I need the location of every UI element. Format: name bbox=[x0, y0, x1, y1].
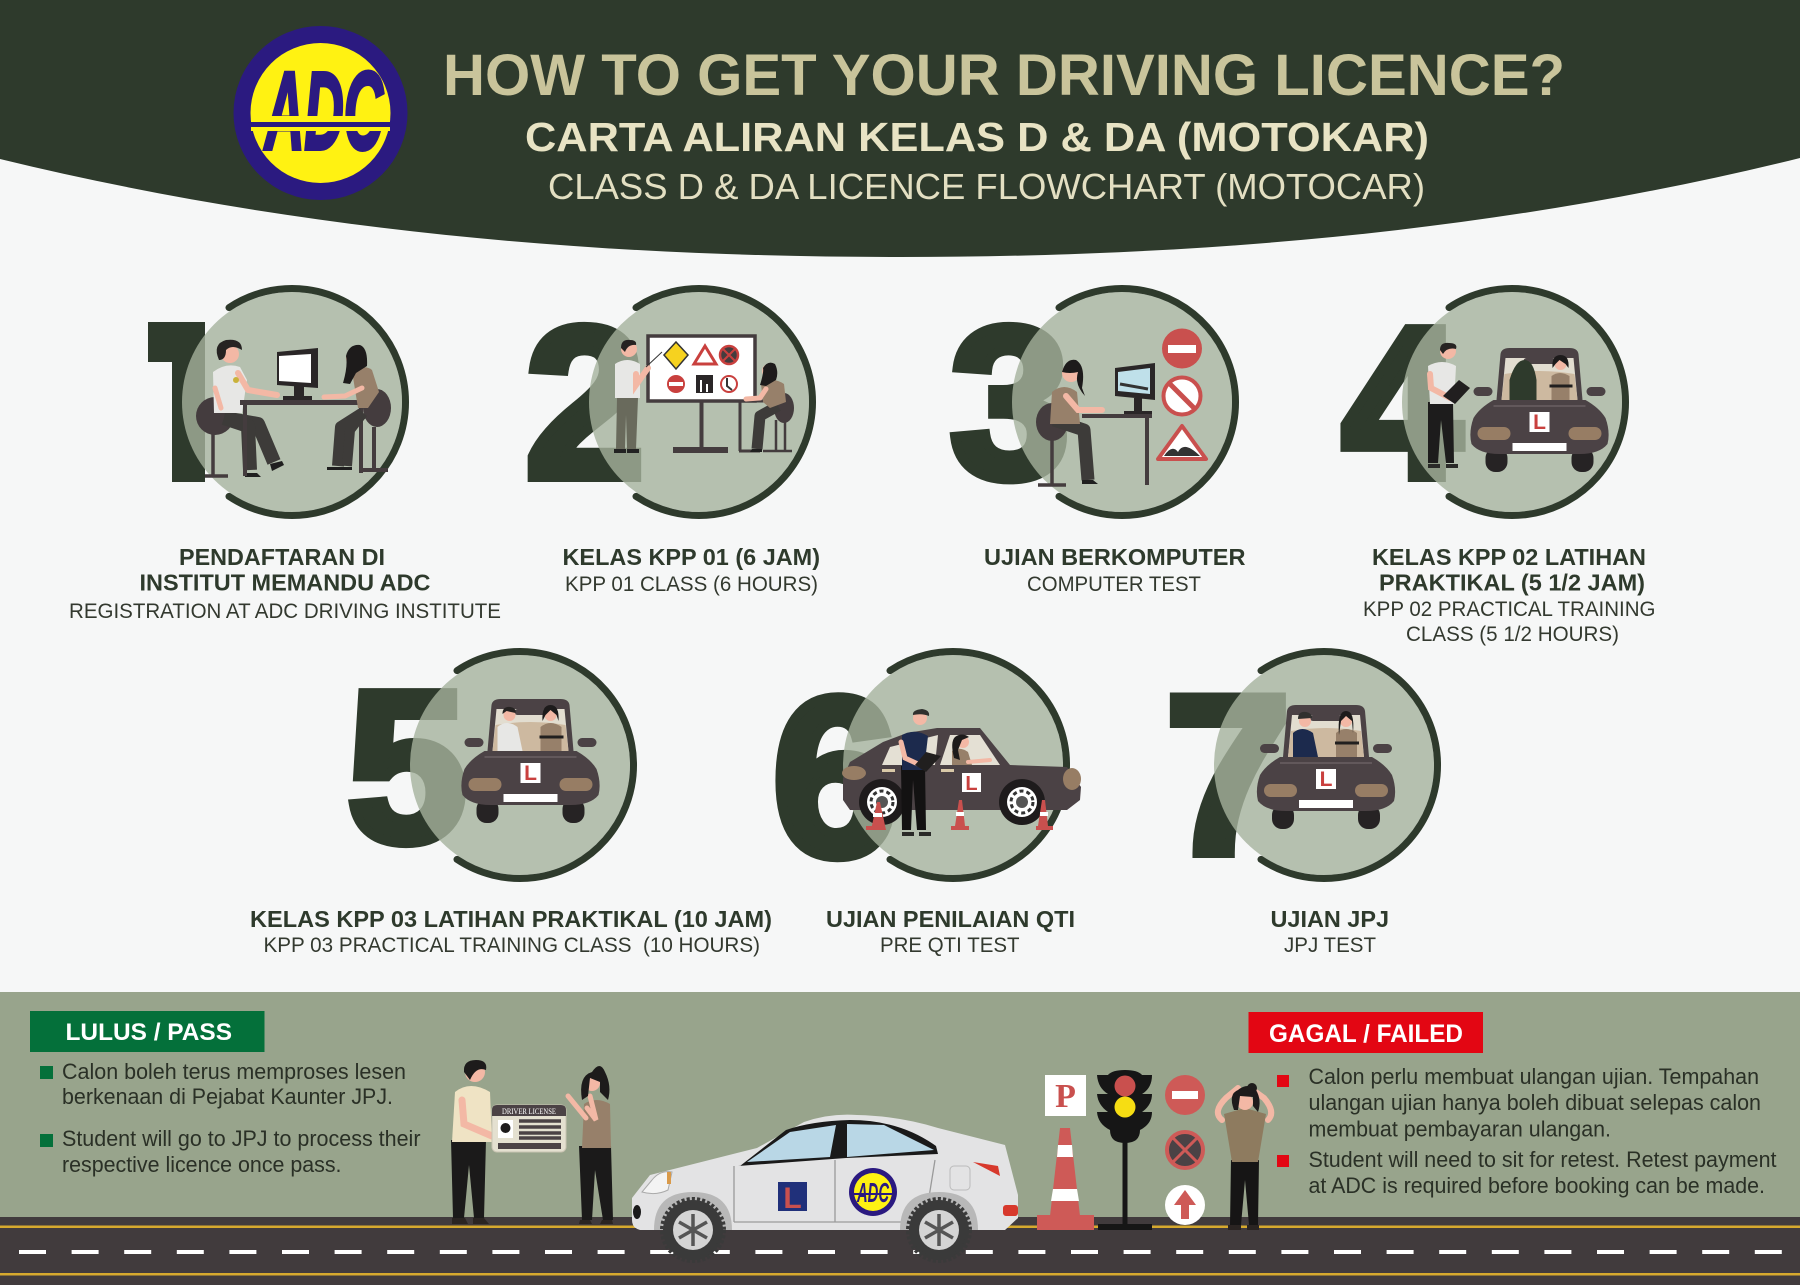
pass label bbox=[30, 1011, 264, 1052]
fail text: at ADC is required before booking can be made. bbox=[1308, 1173, 1765, 1198]
pass text: Student will go to JPJ to process their bbox=[62, 1126, 420, 1151]
step 1 panel bbox=[148, 285, 409, 519]
step 5 caption: KELAS KPP 03 LATIHAN PRAKTIKAL (10 JAM) bbox=[250, 906, 772, 932]
step 7 caption bbox=[1270, 906, 1389, 957]
fail text: Student will need to sit for retest. Retest payment bbox=[1308, 1147, 1776, 1172]
fail text: Calon perlu membuat ulangan ujian. Tempahan bbox=[1308, 1064, 1759, 1089]
step 3 caption bbox=[984, 544, 1246, 596]
step 6 panel bbox=[772, 650, 1081, 903]
illustration: man and woman with licence card: DRIVER LICENSE bbox=[502, 1107, 556, 1116]
fail text: ulangan ujian hanya boleh dibuat selepas calon bbox=[1308, 1090, 1761, 1115]
step 4 caption: KELAS KPP 02 LATIHAN bbox=[1372, 544, 1646, 570]
fail text bbox=[1277, 1064, 1776, 1198]
illustration: practical training car: L bbox=[524, 762, 537, 785]
step 5 caption bbox=[250, 906, 772, 957]
illustration: practical training car bbox=[461, 699, 600, 823]
illustration: instructor and front car: L bbox=[1533, 411, 1546, 434]
step 1 caption: PENDAFTARAN DI bbox=[179, 544, 385, 570]
subtitle english: CLASS D & DA LICENCE FLOWCHART (MOTOCAR) bbox=[548, 166, 1425, 207]
ADC logo: ADC bbox=[264, 50, 384, 173]
step 2 caption: KELAS KPP 01 (6 JAM) bbox=[562, 544, 820, 570]
step 2 panel bbox=[525, 282, 813, 523]
sign: arrow up bbox=[1165, 1185, 1205, 1225]
illustration: white ADC car bbox=[632, 1115, 1018, 1260]
bottom band bbox=[0, 992, 1800, 1217]
step 2 caption bbox=[562, 544, 820, 596]
step 3 caption: UJIAN BERKOMPUTER bbox=[984, 544, 1246, 570]
illustration: cone bbox=[1037, 1128, 1094, 1230]
step 1 caption: REGISTRATION AT ADC DRIVING INSTITUTE bbox=[69, 600, 501, 623]
step 5 panel bbox=[347, 646, 634, 887]
fail label bbox=[1248, 1012, 1483, 1053]
number 2: 2 bbox=[525, 282, 645, 523]
step 4 panel bbox=[1342, 282, 1626, 523]
illustration: worried woman bbox=[1218, 1083, 1271, 1230]
header banner bbox=[0, 0, 1800, 257]
illustration: QTI side car with officer: L bbox=[965, 773, 978, 795]
illustration: traffic light bbox=[1097, 1070, 1152, 1230]
ADC logo bbox=[234, 26, 408, 200]
illustration: JPJ test car: L bbox=[1320, 768, 1333, 791]
sign: parking bbox=[1045, 1075, 1086, 1116]
illustration: white ADC car: ADC bbox=[856, 1177, 889, 1208]
number 7: 7 bbox=[1165, 648, 1291, 901]
step 3 panel bbox=[950, 282, 1236, 523]
pass text: Calon boleh terus memproses lesen bbox=[62, 1059, 406, 1084]
road bbox=[0, 1217, 1800, 1285]
step 1 caption bbox=[69, 544, 501, 623]
illustration: instructor and front car bbox=[1428, 343, 1609, 472]
step 1 caption: INSTITUT MEMANDU ADC bbox=[140, 570, 430, 596]
sign: no stopping bbox=[1167, 1132, 1203, 1168]
pass text: respective licence once pass. bbox=[62, 1152, 342, 1177]
title: HOW TO GET YOUR DRIVING LICENCE? bbox=[443, 43, 1565, 108]
illustration: man and woman with licence card bbox=[451, 1060, 613, 1224]
step 7 panel bbox=[1165, 648, 1438, 901]
fail label: GAGAL / FAILED bbox=[1269, 1020, 1463, 1048]
step 7 caption: JPJ TEST bbox=[1284, 934, 1376, 957]
number 1: 1 bbox=[118, 280, 242, 528]
illustration: JPJ test car bbox=[1257, 705, 1395, 829]
pass text bbox=[40, 1059, 420, 1177]
number 4: 4 bbox=[1342, 282, 1462, 523]
step 4 caption: PRAKTIKAL (5 1/2 JAM) bbox=[1379, 570, 1645, 596]
fail text: membuat pembayaran ulangan. bbox=[1308, 1116, 1611, 1142]
illustration: computer test bbox=[1036, 328, 1206, 485]
number 6: 6 bbox=[772, 650, 898, 903]
step 6 caption: PRE QTI TEST bbox=[880, 934, 1020, 957]
step 7 caption: UJIAN JPJ bbox=[1270, 906, 1389, 932]
illustration: registration desk bbox=[196, 340, 391, 477]
sign: no entry bbox=[1165, 1075, 1205, 1115]
step 4 caption bbox=[1363, 544, 1656, 646]
step 4 caption: CLASS (5 1/2 HOURS) bbox=[1406, 623, 1619, 646]
illustration: classroom board bbox=[614, 336, 794, 453]
step 3 caption: COMPUTER TEST bbox=[1027, 573, 1201, 596]
number 5: 5 bbox=[347, 646, 467, 887]
sign: parking: P bbox=[1055, 1078, 1076, 1115]
step 4 caption: KPP 02 PRACTICAL TRAINING bbox=[1363, 598, 1656, 621]
subtitle malay: CARTA ALIRAN KELAS D & DA (MOTOKAR) bbox=[525, 114, 1429, 160]
pass label: LULUS / PASS bbox=[66, 1019, 232, 1046]
number 3: 3 bbox=[950, 282, 1070, 523]
pass text: berkenaan di Pejabat Kaunter JPJ. bbox=[62, 1084, 393, 1109]
step 5 caption: KPP 03 PRACTICAL TRAINING CLASS (10 HOURS) bbox=[264, 934, 760, 957]
step 6 caption: UJIAN PENILAIAN QTI bbox=[826, 906, 1075, 932]
step 6 caption bbox=[826, 906, 1075, 957]
step 2 caption: KPP 01 CLASS (6 HOURS) bbox=[565, 573, 818, 596]
illustration: white ADC car: L bbox=[783, 1182, 802, 1215]
illustration: QTI side car with officer bbox=[842, 709, 1081, 836]
